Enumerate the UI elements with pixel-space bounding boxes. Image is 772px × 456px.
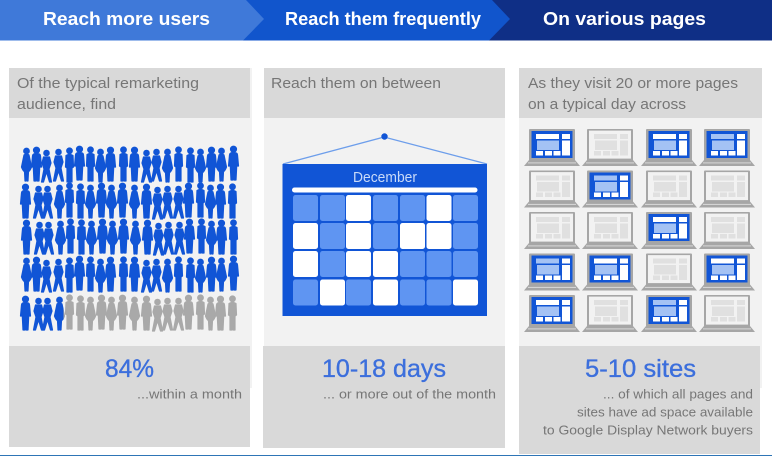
stat footer: 10-18 days: ... or more out of the month	[323, 386, 496, 402]
panel: reach more users	[9, 68, 252, 447]
stat footer: 5-10 sites: sites have ad space available	[577, 404, 753, 420]
panel heading: typical remarketing audience: Of the typical remarketing	[17, 75, 199, 92]
panel heading: reach them on between: Reach them on between	[271, 75, 441, 92]
stat footer: 5-10 sites: ... of which all pages and	[603, 386, 753, 402]
banner segment: on various pages	[480, 0, 772, 40]
stat footer: 5-10 sites	[519, 346, 760, 454]
calendar month: December	[353, 170, 417, 186]
bottom rule	[0, 455, 772, 456]
calendar hanger	[283, 133, 487, 164]
laptop grid: pages with ad space	[524, 129, 755, 332]
banner segment: reach them frequently: Reach them frequently	[285, 9, 481, 29]
calendar	[282, 133, 487, 316]
calendar day grid	[293, 195, 478, 306]
panel heading: pages per day: As they visit 20 or more pages	[528, 75, 738, 92]
weekday strip	[292, 188, 478, 192]
people chart: 84 percent highlighted	[20, 146, 238, 331]
panel heading: pages per day	[519, 68, 762, 118]
panel heading: reach them on between	[264, 68, 505, 118]
header banner	[0, 0, 772, 40]
banner segment: reach them frequently	[235, 0, 510, 40]
stat footer: 84 percent: 84%	[105, 355, 154, 383]
banner segment: reach more users	[0, 0, 264, 40]
panel heading: typical remarketing audience: audience, find	[17, 96, 116, 113]
panel heading: pages per day: on a typical day across	[528, 96, 686, 113]
stat footer: 5-10 sites: to Google Display Network buyers	[543, 422, 754, 438]
stat footer: 10-18 days	[263, 346, 505, 448]
panel: reach them frequently	[263, 68, 505, 448]
panel: on various pages	[519, 68, 762, 454]
stat footer: 10-18 days: 10-18 days	[322, 355, 446, 383]
stat footer: 5-10 sites: 5-10 sites	[585, 355, 696, 383]
banner segment: on various pages: On various pages	[543, 9, 706, 29]
stat footer: 84 percent: ...within a month	[137, 386, 242, 402]
banner segment: reach more users: Reach more users	[43, 9, 210, 29]
panel heading: typical remarketing audience	[9, 68, 250, 118]
stat footer: 84 percent	[9, 346, 250, 447]
